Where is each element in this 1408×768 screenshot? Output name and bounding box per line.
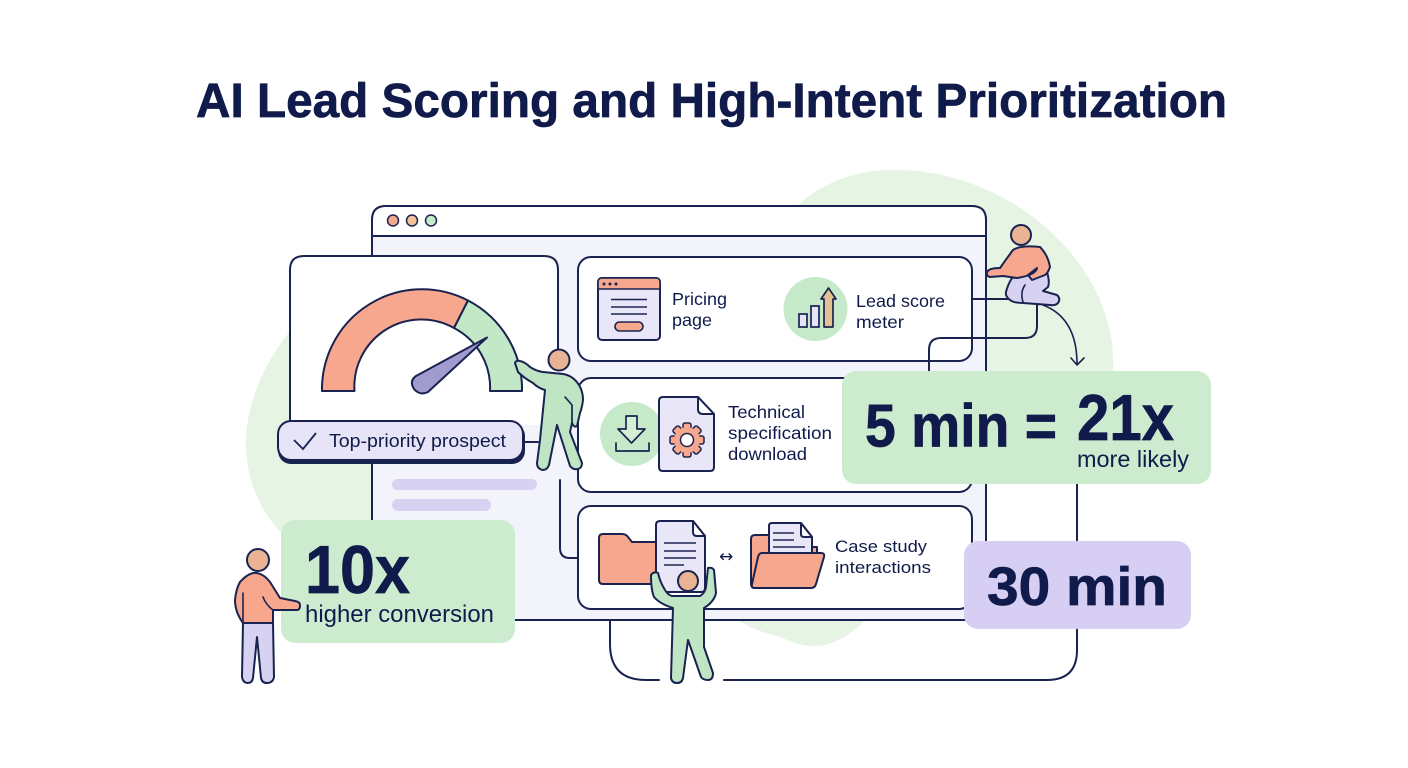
icon: lead score bars: [784, 277, 848, 341]
icon: download: [600, 402, 664, 466]
figure: holding document: [651, 568, 716, 683]
panel: pricing and lead score: [578, 257, 972, 361]
check icon: [294, 433, 316, 449]
connector: left side to case study: [560, 480, 578, 558]
figure: standing presenter: [235, 549, 300, 683]
connector: bottom route: [610, 484, 1077, 680]
callout: 5 min = 21x: [842, 371, 1211, 484]
callout: 30 min: 30 min: [987, 557, 1167, 617]
badge: top-priority prospect: [278, 421, 525, 464]
browser window: [372, 206, 986, 620]
callout: 5 min = 21x: more likely: [1077, 446, 1190, 472]
label: case study interactions: interactions: [835, 558, 931, 577]
badge: top-priority prospect: Top-priority prospect: [329, 431, 506, 451]
connector: pill to figure: [525, 441, 538, 443]
panel: case study: [578, 506, 972, 609]
gauge needle: [412, 338, 487, 393]
window dots: [388, 215, 436, 226]
connector: route above callout: [929, 299, 1040, 372]
placeholder bars: [392, 479, 537, 511]
label: technical specification download: specification: [728, 423, 832, 443]
callout: 30 min: [964, 541, 1191, 629]
label: lead score meter: Lead score: [856, 291, 945, 311]
title: AI Lead Scoring and High-Intent Prioritization: [196, 74, 1227, 128]
icon: open folder: [751, 523, 824, 588]
arrow: curved to callout: [1043, 305, 1084, 365]
title bar: [372, 206, 986, 236]
icon: folder: [599, 534, 660, 584]
icon: gear: [670, 423, 704, 457]
background blobs: [246, 170, 1113, 646]
panel: gauge: [290, 256, 558, 425]
icon: document: [656, 521, 705, 592]
label: pricing page: Pricing: [672, 289, 727, 309]
callout: 10x higher conversion: higher conversion: [305, 601, 494, 628]
label: lead score meter: meter: [856, 312, 904, 332]
figure: pointing at gauge: [515, 350, 583, 470]
icon: specification document: [659, 397, 714, 471]
label: case study interactions: Case study: [835, 537, 928, 556]
callout: 10x higher conversion: 10x: [305, 532, 410, 608]
gauge chart: [322, 289, 522, 393]
label: technical specification download: Technical: [728, 402, 805, 422]
figure: sitting on panel: [987, 225, 1059, 305]
callout: 5 min = 21x: 21x: [1077, 381, 1174, 454]
icon: pricing page: [598, 278, 660, 340]
label: technical specification download: download: [728, 444, 807, 464]
panel: technical specification: [578, 378, 972, 492]
callout: 5 min = 21x: 5 min =: [865, 392, 1057, 460]
arrow: double: ↔: [719, 547, 733, 567]
callout: 10x higher conversion: [281, 520, 515, 643]
label: pricing page: page: [672, 310, 712, 330]
